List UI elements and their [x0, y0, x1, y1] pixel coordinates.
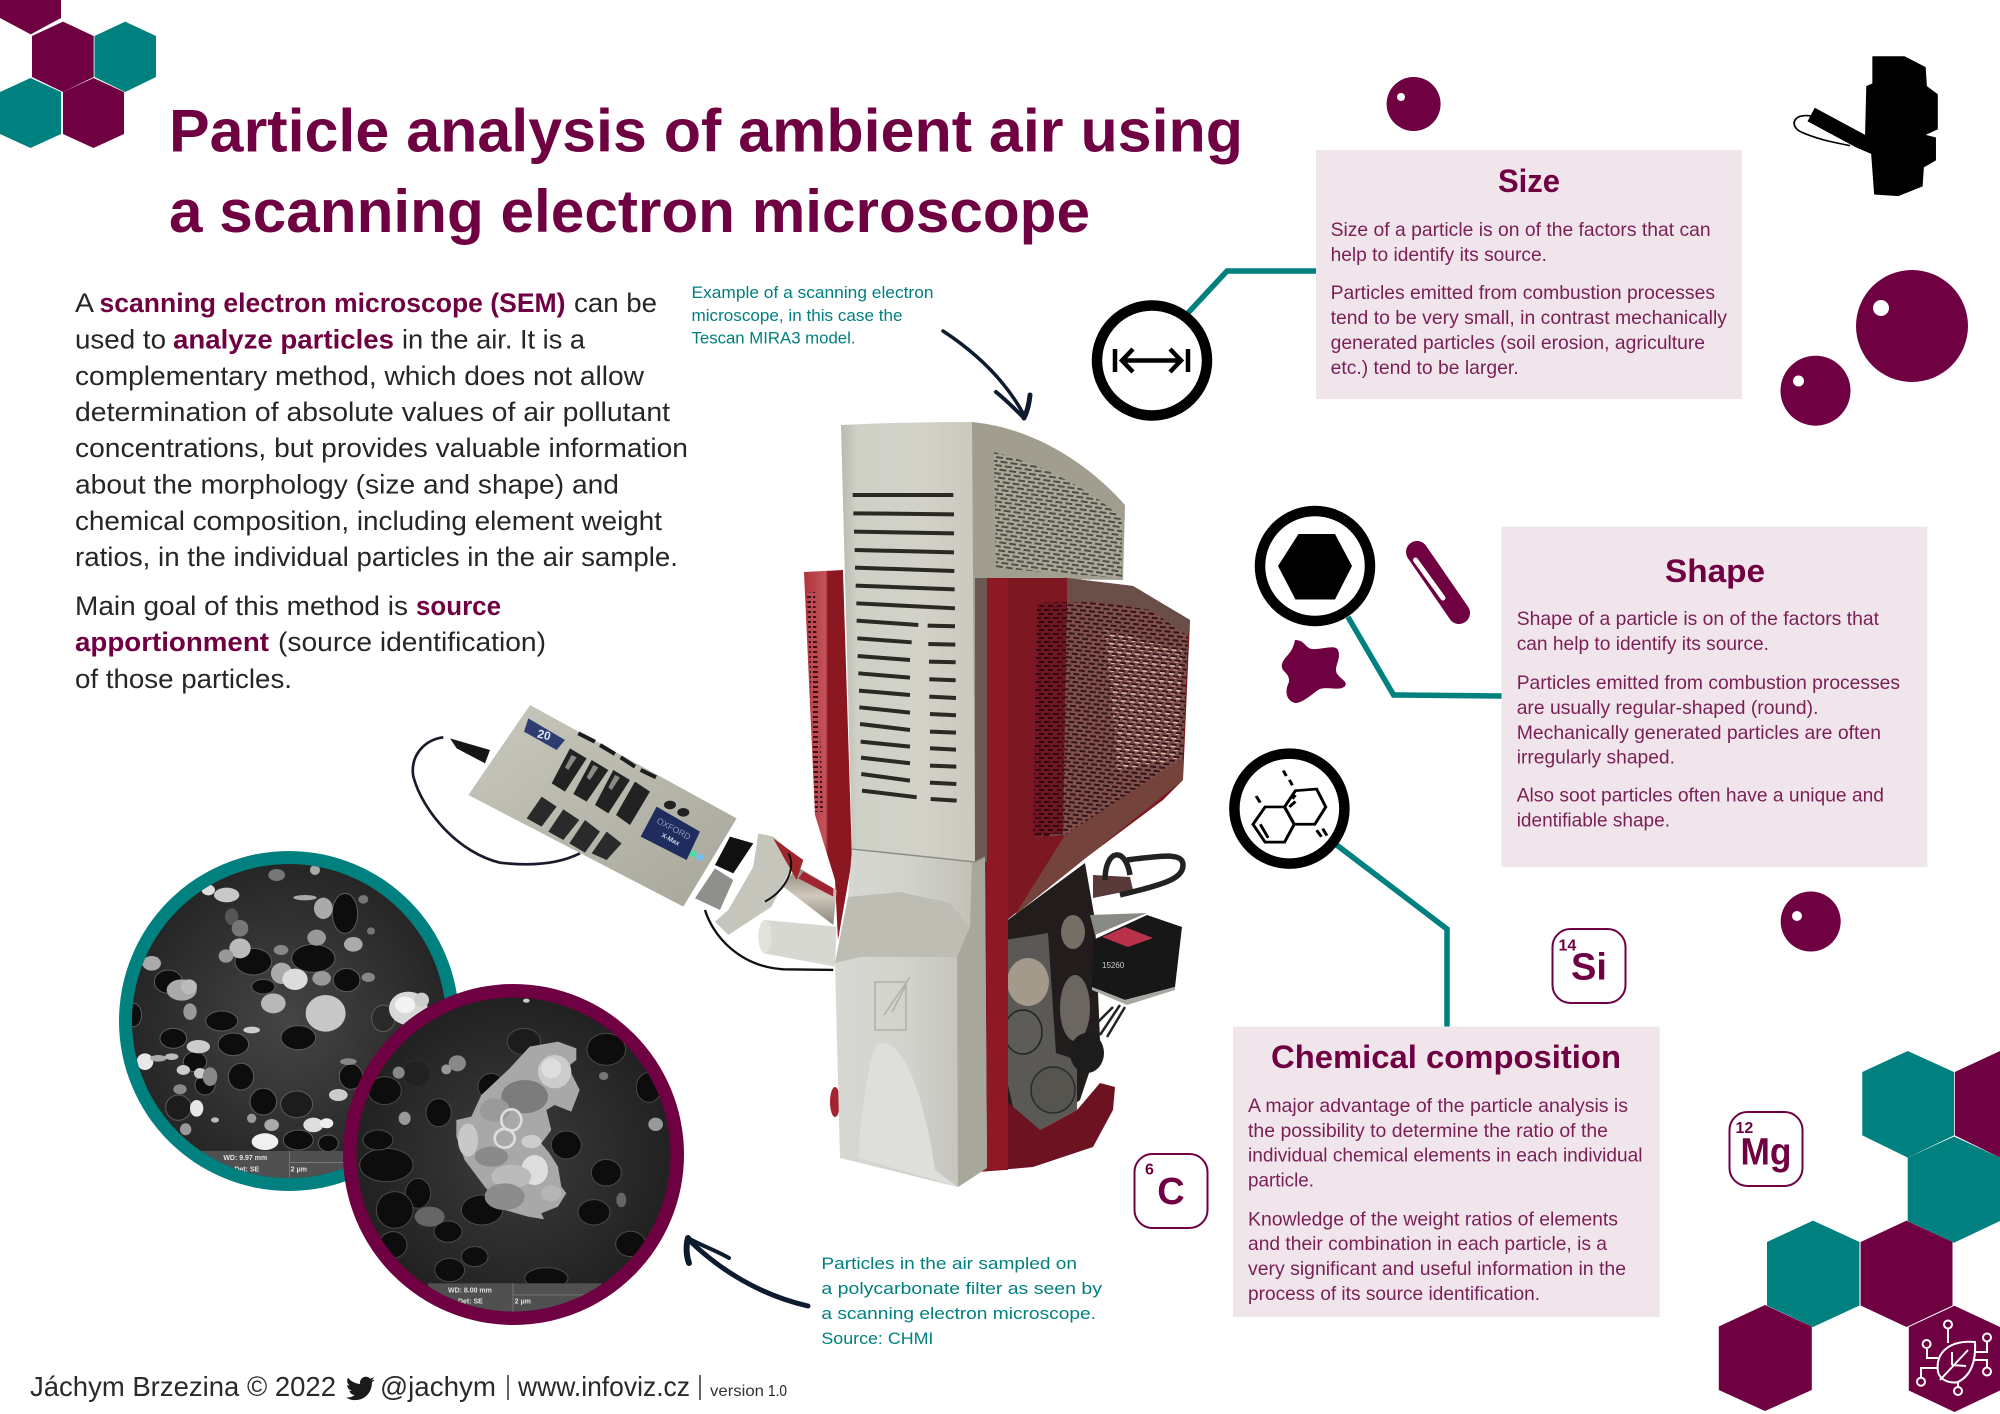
model text: X-Max [660, 832, 681, 848]
oxford label [641, 807, 700, 860]
silver cylinder [763, 920, 837, 967]
icon: element Si: 14 [1558, 938, 1576, 954]
detector upper slots [552, 748, 650, 825]
text block: introduction: analyze particles [173, 324, 394, 354]
text: size description: Size of a particle is on of the factors that can [1331, 219, 1711, 241]
text: size description: etc.) tend to be larger. [1331, 357, 1519, 379]
text: chemical description [1248, 1095, 1642, 1305]
image: SEM photo, teal frame: 2 μm [291, 1167, 307, 1174]
text block: introduction: chemical composition, including element weight [75, 506, 663, 536]
chamber [1005, 863, 1100, 1130]
caption: microscope example [692, 284, 934, 348]
caption: SEM photos [821, 1254, 1103, 1348]
red body [977, 578, 1190, 1172]
title: a scanning electron microscope [169, 178, 1090, 245]
vent slots [853, 495, 957, 801]
decoration: top-left hexagons [0, 0, 156, 148]
text: chemical description: the possibility to determine the ratio of the [1248, 1120, 1608, 1142]
text block: introduction: determination of absolute values of air pollutant [75, 397, 671, 427]
text: size description: help to identify its source. [1331, 244, 1547, 266]
connector: shape [1348, 617, 1502, 696]
icon: irregular particle [1282, 640, 1346, 703]
icon: leaf circuit logo [1917, 1320, 1991, 1395]
detector top slots [578, 733, 656, 777]
text: shape description: Mechanically generated particles are often [1517, 722, 1881, 744]
footer: Jáchym Brzezina © 2022 [30, 1371, 336, 1402]
caption: SEM photos: Source: CHMI [821, 1329, 933, 1348]
image: SEM photo, purple frame: Det: SE [458, 1299, 483, 1306]
text: size description: Particles emitted from combustion processes [1331, 282, 1715, 304]
text block: introduction: scanning electron microscope (SEM) [100, 288, 566, 318]
text block: introduction: of those particles. [75, 664, 292, 694]
title: Particle analysis of ambient air using [169, 98, 1243, 164]
arrow: to microscope [943, 331, 1030, 418]
icon: element C [1134, 1154, 1208, 1228]
caption: microscope example: Example of a scanning electron [692, 284, 934, 302]
detector body [468, 705, 737, 907]
detector lower slots [527, 797, 622, 860]
slot highlights [565, 755, 620, 790]
text: shape description: are usually regular-shaped (round). [1517, 697, 1818, 719]
text: shape description: irregularly shaped. [1517, 747, 1675, 769]
icon: rod particle [1416, 552, 1459, 613]
footer: www.infoviz.cz [517, 1371, 690, 1402]
status leds [690, 851, 703, 861]
upper column side [972, 422, 1125, 862]
panel: size [1316, 150, 1742, 399]
image: SEM photo, teal frame: Det: SE [234, 1167, 260, 1174]
heading: chemical composition: Chemical composition [1271, 1039, 1621, 1075]
icon: element Si: Si [1571, 946, 1607, 988]
text: shape description: Particles emitted from combustion processes [1517, 672, 1900, 694]
icon: element C: C [1157, 1171, 1185, 1213]
text block: introduction: in the air. It is a [402, 324, 585, 354]
icon: twitter [346, 1377, 375, 1400]
image: SEM photo, purple frame: WD: 8.00 mm [448, 1287, 492, 1294]
text block: introduction: complementary method, which does not allow [75, 361, 645, 391]
detector [450, 705, 837, 967]
panel: chemical composition [1233, 1026, 1660, 1317]
pipe red strip [798, 872, 833, 897]
heading: shape: Shape [1665, 553, 1765, 589]
collar [715, 833, 797, 935]
caption: SEM photos: a polycarbonate filter as seen by [821, 1279, 1103, 1298]
detector number: 20 [536, 727, 553, 744]
footer: @jachym [380, 1371, 496, 1402]
icon: element Mg [1730, 1112, 1802, 1186]
text: shape description: identifiable shape. [1517, 810, 1670, 832]
icon: element Mg: 12 [1736, 1120, 1753, 1137]
text block: introduction: apportionment [75, 627, 269, 657]
upper column front [841, 422, 975, 862]
cable loop [1105, 855, 1183, 895]
text: shape description: Also soot particles often have a unique and [1517, 784, 1884, 806]
image: scanning electron microscope [413, 422, 1190, 1187]
plug [450, 738, 490, 763]
text: size description: tend to be very small, in contrast mechanically [1331, 307, 1727, 329]
ovals [664, 801, 689, 817]
icon: shape [1260, 511, 1370, 621]
image: SEM photo, purple frame [343, 984, 684, 1325]
connector: chemical composition [1337, 845, 1447, 1026]
icon: element Mg: Mg [1740, 1131, 1792, 1173]
footer: version [710, 1383, 764, 1400]
image: SEM photo, teal frame [119, 851, 459, 1191]
icon: element Si [1552, 929, 1626, 1003]
icon: small round particle [1781, 892, 1841, 952]
cylinder end [758, 920, 772, 953]
detector cables [413, 737, 833, 970]
text block: introduction: concentrations, but provides valuable information [75, 433, 688, 463]
detector pipe [783, 867, 837, 925]
text: size description: generated particles (soil erosion, agriculture [1331, 332, 1705, 354]
arrow: to SEM photos [687, 1238, 808, 1306]
image: scanning electron microscope: 15260 [1102, 961, 1125, 970]
footer [30, 1371, 787, 1402]
text block: introduction [75, 288, 688, 694]
tescan logo [875, 977, 910, 1030]
icon: medium round particle [1780, 356, 1850, 426]
text: chemical description: individual chemical elements in each individual [1248, 1145, 1642, 1167]
black ring [765, 853, 791, 902]
heading: size: Size [1498, 163, 1560, 199]
icon: chemical structure [1234, 754, 1344, 864]
red ring [773, 838, 803, 880]
text: chemical description: process of its source identification. [1248, 1283, 1540, 1305]
icon: size [1097, 306, 1207, 416]
chrome ring [695, 868, 733, 910]
image: SEM photo, teal frame: WD: 9.97 mm [223, 1155, 267, 1162]
left red panel [804, 570, 852, 940]
caption: SEM photos: Particles in the air sampled on [821, 1254, 1077, 1273]
panel: shape [1502, 527, 1928, 867]
red base [977, 1083, 1115, 1172]
icon: microscope silhouette [1794, 56, 1938, 196]
text: shape description: can help to identify its source. [1517, 633, 1769, 655]
footer: 1.0 [768, 1383, 787, 1400]
black box [1092, 915, 1182, 1000]
text: chemical description: and their combination in each particle, is a [1248, 1233, 1607, 1255]
icon: round particle [1387, 77, 1441, 131]
text: chemical description: particle. [1248, 1170, 1314, 1192]
red mesh [1033, 602, 1188, 837]
text: shape description: Shape of a particle is on of the factors that [1517, 608, 1880, 630]
text: chemical description: very significant and useful information in the [1248, 1258, 1626, 1280]
text block: introduction: Main goal of this method is [75, 591, 408, 621]
text block: introduction: (source identification) [278, 627, 546, 657]
text block: introduction: ratios, in the individual particles in the air sample. [75, 542, 678, 572]
oxford text: OXFORD [655, 816, 692, 842]
icon: large round particle [1856, 270, 1968, 382]
text: size description [1331, 219, 1727, 379]
detector number label [524, 718, 565, 750]
caption: SEM photos: a scanning electron microscope. [821, 1304, 1096, 1323]
connector: size [1187, 271, 1316, 314]
caption: microscope example: microscope, in this case the [692, 307, 902, 325]
title [169, 98, 1243, 245]
text block: introduction: can be [574, 288, 657, 318]
icon: element C: 6 [1145, 1162, 1154, 1179]
text: chemical description: Knowledge of the weight ratios of elements [1248, 1208, 1618, 1230]
lower column [835, 849, 987, 1187]
caption: microscope example: Tescan MIRA3 model. [692, 330, 856, 348]
decoration: bottom-right hexagons [1719, 1051, 2000, 1412]
text: shape description [1517, 608, 1900, 832]
text block: introduction: used to [75, 324, 166, 354]
scale bar [428, 1283, 601, 1315]
text block: introduction: source [416, 591, 501, 621]
text: chemical description: A major advantage of the particle analysis is [1248, 1095, 1628, 1117]
text block: introduction: A [75, 288, 94, 318]
detector neck [715, 837, 753, 873]
text block: introduction: about the morphology (size and shape) and [75, 470, 619, 500]
image: SEM photo, purple frame: 2 μm [515, 1299, 531, 1306]
scale bar [201, 1151, 344, 1178]
